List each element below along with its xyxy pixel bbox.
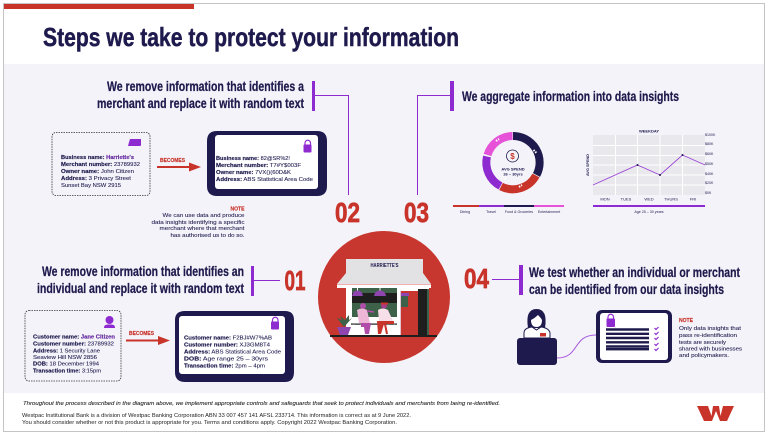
connector: step 4: [492, 265, 523, 295]
customer original card: Seaview Hill NSW 2856: [33, 355, 97, 361]
icon: person: [104, 316, 115, 328]
note: tests: tests are securely: [679, 340, 726, 346]
donut legend: Food & Groceries: [505, 210, 533, 214]
line chart: $40K: [705, 172, 714, 176]
merchant original card: Sunset Bay NSW 2915: [61, 183, 121, 189]
icon: dollar: $: [510, 152, 515, 161]
heading: step 1: [37, 263, 244, 296]
merchant anonymised card: Merchant number: T7#Y$003F: [216, 163, 302, 169]
customer anonymised card: Transaction time: 2pm – 4pm: [184, 364, 265, 370]
donut chart: 26 – 30yrs: [503, 172, 523, 176]
note: tests: pass re-identification: [679, 333, 737, 339]
customer anonymised card: DOB: Age range 25 – 30yrs: [184, 356, 268, 362]
illustration: person at laptop: [517, 309, 557, 365]
line chart: FRI: [690, 196, 696, 202]
icon: lock: [271, 317, 279, 330]
number 03: 03: [404, 197, 429, 228]
merchant original card: Business name: Harriette's: [61, 155, 134, 161]
heading: step 1: We remove information that identifies an: [42, 263, 244, 279]
number 01: 01: [284, 265, 306, 296]
heading: step 1: individual and replace it with random text: [37, 280, 244, 296]
heading: step 4: [529, 264, 740, 297]
line chart: $20K: [705, 181, 714, 185]
connector curve: [557, 335, 596, 358]
donut legend: Entertainment: [538, 210, 560, 214]
note: tests: [679, 318, 742, 359]
customer anonymised card: Customer number: XJ3GM8T4: [184, 342, 270, 348]
note: tests: and policymakers.: [679, 353, 729, 359]
arrow: becomes (merchant): BECOMES: [160, 158, 185, 164]
top red bar: [4, 4, 194, 9]
Westpac logo: [697, 406, 734, 421]
seated people: [351, 302, 397, 335]
note: tests: shared with businesses: [679, 346, 742, 352]
footer legal text: You should consider whether or not this product is appropriate for you. Terms and conditions apply. Copyright 2022 Westpac Banking Corporation.: [22, 420, 397, 426]
line chart: $100K: [705, 133, 716, 137]
connector: step 3: [418, 81, 454, 195]
note: merchant: [152, 206, 245, 239]
heading: step 3: We aggregate information into data insights: [462, 88, 679, 104]
footer statement: Throughout the process described in the diagram above, we implement appropriate controls and safeguards that seek to protect individuals and merchants from being re-identified.: [23, 401, 500, 407]
customer original card: Address: 1 Security Lane: [33, 348, 100, 354]
donut legend: Travel: [486, 210, 496, 214]
note: merchant: We can use data and produce: [162, 213, 244, 219]
line chart: TUES: [621, 196, 632, 202]
merchant original card: Merchant number: 23789932: [61, 162, 140, 168]
lamps: [352, 287, 386, 296]
illustration: Harriette's shop: [318, 231, 450, 363]
line chart: THURS: [664, 196, 678, 202]
slide background panel: [4, 64, 764, 393]
line chart: $50K: [705, 162, 714, 166]
heading: step 2: We remove information that identifies a: [107, 78, 304, 94]
arrow: becomes (customer): BECOMES: [129, 331, 154, 337]
number 02: 02: [335, 197, 360, 228]
line chart: WEEKDAY: [639, 128, 659, 134]
customer anonymised card: Address: ABS Statistical Area Code: [184, 350, 281, 356]
line chart: Age 25 – 30 years: [634, 210, 664, 214]
number 04: 04: [464, 263, 489, 294]
note: merchant: merchant where that merchant: [160, 226, 245, 232]
customer original card: Customer name: Jane Citizen: [33, 334, 116, 340]
icon: lock: [606, 314, 615, 327]
line chart: MON: [600, 196, 610, 202]
note: tests: Only data insights that: [679, 326, 741, 332]
note: merchant: has authorised us to do so.: [170, 233, 245, 239]
customer original card: Transaction time: 3:15pm: [33, 368, 101, 374]
customer original card: DOB: 18 December 1994: [33, 362, 99, 368]
donut legend: [453, 205, 564, 214]
heading: step 2: merchant and replace it with random text: [97, 95, 304, 111]
merchant anonymised card: Business name: 82@SR%2!: [216, 156, 290, 162]
icon: lock: [304, 140, 312, 152]
tablet with lock and checklist: [596, 310, 672, 363]
footer legal text: [22, 413, 411, 426]
shop awning: HARRIETTE'S: [370, 263, 399, 269]
note: tests: NOTE: [679, 318, 693, 324]
line chart: WED: [644, 196, 654, 202]
line chart: AVG SPEND: [586, 154, 590, 176]
line chart: [586, 128, 716, 214]
merchant anonymised card: [207, 131, 327, 196]
customer original card: [25, 310, 121, 381]
merchant original card: Address: 3 Privacy Street: [61, 176, 131, 182]
note: merchant: data insights identifying a specific: [152, 220, 245, 226]
connector: step 2: [312, 81, 348, 195]
note: merchant: NOTE: [230, 206, 245, 212]
footer legal text: Westpac Institutional Bank is a division of Westpac Banking Corporation ABN 33 007 457 141 AFSL 233714. This information is correct as at 9 June 2022.: [22, 413, 411, 419]
merchant anonymised card: Owner name: 7VX()(60D&K: [216, 170, 291, 176]
arrow: becomes (merchant): [157, 158, 201, 172]
line chart: $0K: [705, 191, 712, 195]
arrow: becomes (customer): [126, 331, 170, 345]
line chart: $60K: [705, 152, 714, 156]
title: Steps we take to protect your information: [43, 22, 459, 52]
merchant original card: [52, 132, 150, 196]
icon: shop tag: [128, 139, 141, 146]
potted plant: [337, 315, 352, 335]
merchant original card: Owner name: John Citizen: [61, 169, 134, 175]
customer anonymised card: [175, 311, 294, 382]
line chart: $80K: [705, 142, 714, 146]
merchant anonymised card: Address: ABS Statistical Area Code: [216, 177, 313, 183]
donut chart: [486, 136, 540, 189]
donut chart: AVG SPEND: [501, 166, 525, 172]
donut legend: Dining: [460, 210, 470, 214]
connector: step 1: [251, 266, 280, 296]
customer anonymised card: Customer name: F2BJ#W7%AB: [184, 336, 272, 342]
heading: step 2: [97, 78, 304, 111]
customer original card: Customer number: 23789932: [33, 342, 114, 348]
